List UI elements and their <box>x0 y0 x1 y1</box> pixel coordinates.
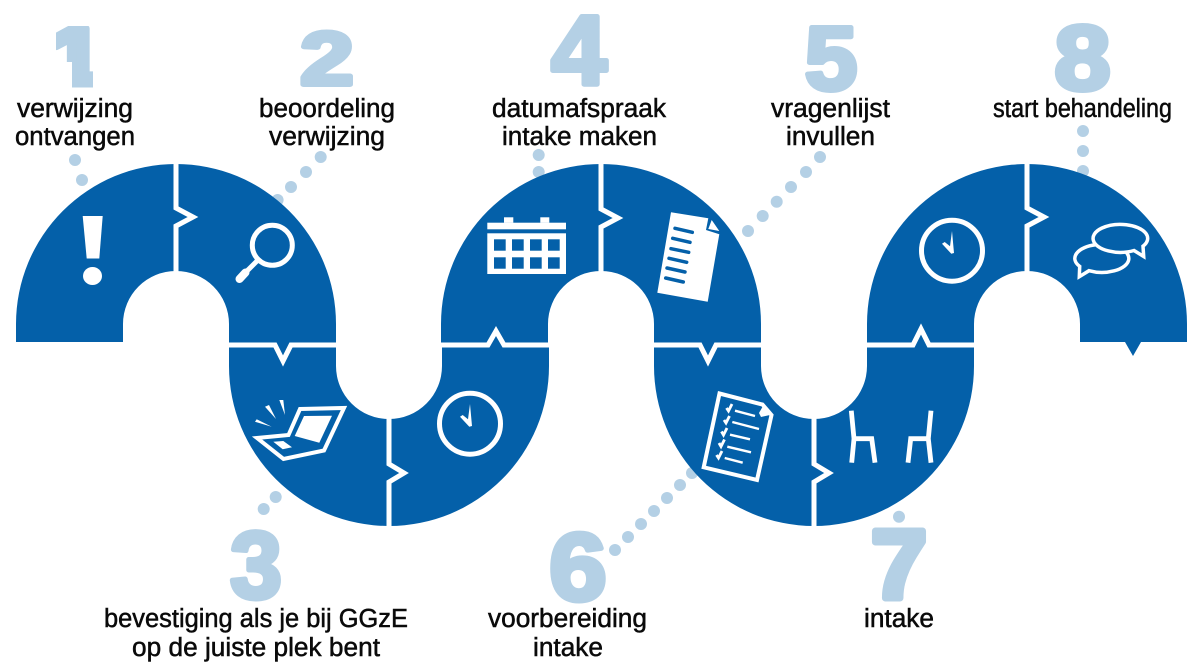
segment step 7 <box>814 345 974 526</box>
label step 4: datumafspraak <box>492 95 666 123</box>
icon: magnifying glass <box>240 225 292 279</box>
icon: clock <box>440 393 500 454</box>
segment step 6 <box>654 345 814 526</box>
label step 3: bevestiging als je bij GGzE <box>104 605 408 633</box>
step 1: verwijzing ontvangen <box>15 11 176 342</box>
label step 6: intake <box>533 634 603 662</box>
icon: exclamation mark <box>83 216 103 285</box>
icon: document <box>657 212 719 302</box>
segment step 2 <box>176 164 336 346</box>
icon: calendar <box>487 217 566 274</box>
waiting segment with second clock <box>867 164 1027 346</box>
label step 3 <box>104 605 408 662</box>
number 7: 7 <box>871 510 927 619</box>
segment step 8 with end pointer <box>1027 164 1187 356</box>
segment step 5 <box>601 164 761 346</box>
icon: checklist <box>704 394 772 480</box>
number 1: 1 <box>49 11 103 101</box>
connector dots step 8 <box>1077 125 1089 177</box>
label step 8: start behandeling <box>993 95 1172 123</box>
connector dots step 6 <box>609 467 698 556</box>
connector dots step 5 <box>742 151 826 237</box>
number 8: 8 <box>1054 7 1111 109</box>
step 8: start behandeling <box>993 7 1187 356</box>
waiting segment with clock <box>389 345 549 526</box>
label step 6: voorbereiding <box>488 605 647 633</box>
label step 2: beoordeling <box>259 95 395 123</box>
icon: clock <box>922 220 982 281</box>
icon: speech bubbles <box>1075 224 1148 277</box>
connector dots step 3 <box>258 491 282 515</box>
label step 6 <box>488 605 647 662</box>
icon: laptop <box>255 400 344 459</box>
connector dots step 4 <box>533 149 545 178</box>
label step 2: verwijzing <box>269 123 385 151</box>
step 5: vragenlijst invullen <box>601 8 890 346</box>
label step 5: vragenlijst <box>771 95 890 123</box>
connector dots step 1 <box>69 154 88 186</box>
label step 2 <box>259 95 395 151</box>
segment step 1 <box>16 164 176 342</box>
label step 5: invullen <box>786 123 875 151</box>
connector dots step 2 <box>272 151 327 206</box>
label step 1: verwijzing <box>17 95 133 123</box>
segment step 3 <box>229 345 389 526</box>
step 3: bevestiging <box>104 345 408 662</box>
segment waiting 1 <box>389 345 549 526</box>
label step 4 <box>492 95 666 151</box>
label step 5 <box>771 95 890 151</box>
label step 7: intake <box>864 605 934 633</box>
label step 1: ontvangen <box>15 123 135 151</box>
icon: two chairs <box>851 411 931 463</box>
step 7: intake <box>814 345 974 633</box>
segment step 4 <box>441 164 601 346</box>
step 2: beoordeling verwijzing <box>176 17 395 346</box>
connector dot step 7 <box>893 511 905 523</box>
number 3: 3 <box>230 512 282 618</box>
step 6: voorbereiding intake <box>488 345 814 662</box>
step 4: datumafspraak intake maken <box>441 0 666 346</box>
label step 4: intake maken <box>502 123 657 151</box>
label step 3: op de juiste plek bent <box>132 634 380 662</box>
number 6: 6 <box>549 514 607 621</box>
number 2: 2 <box>300 17 354 101</box>
label step 1 <box>15 95 135 151</box>
segment waiting 2 <box>867 164 1027 346</box>
number 5: 5 <box>805 8 857 109</box>
